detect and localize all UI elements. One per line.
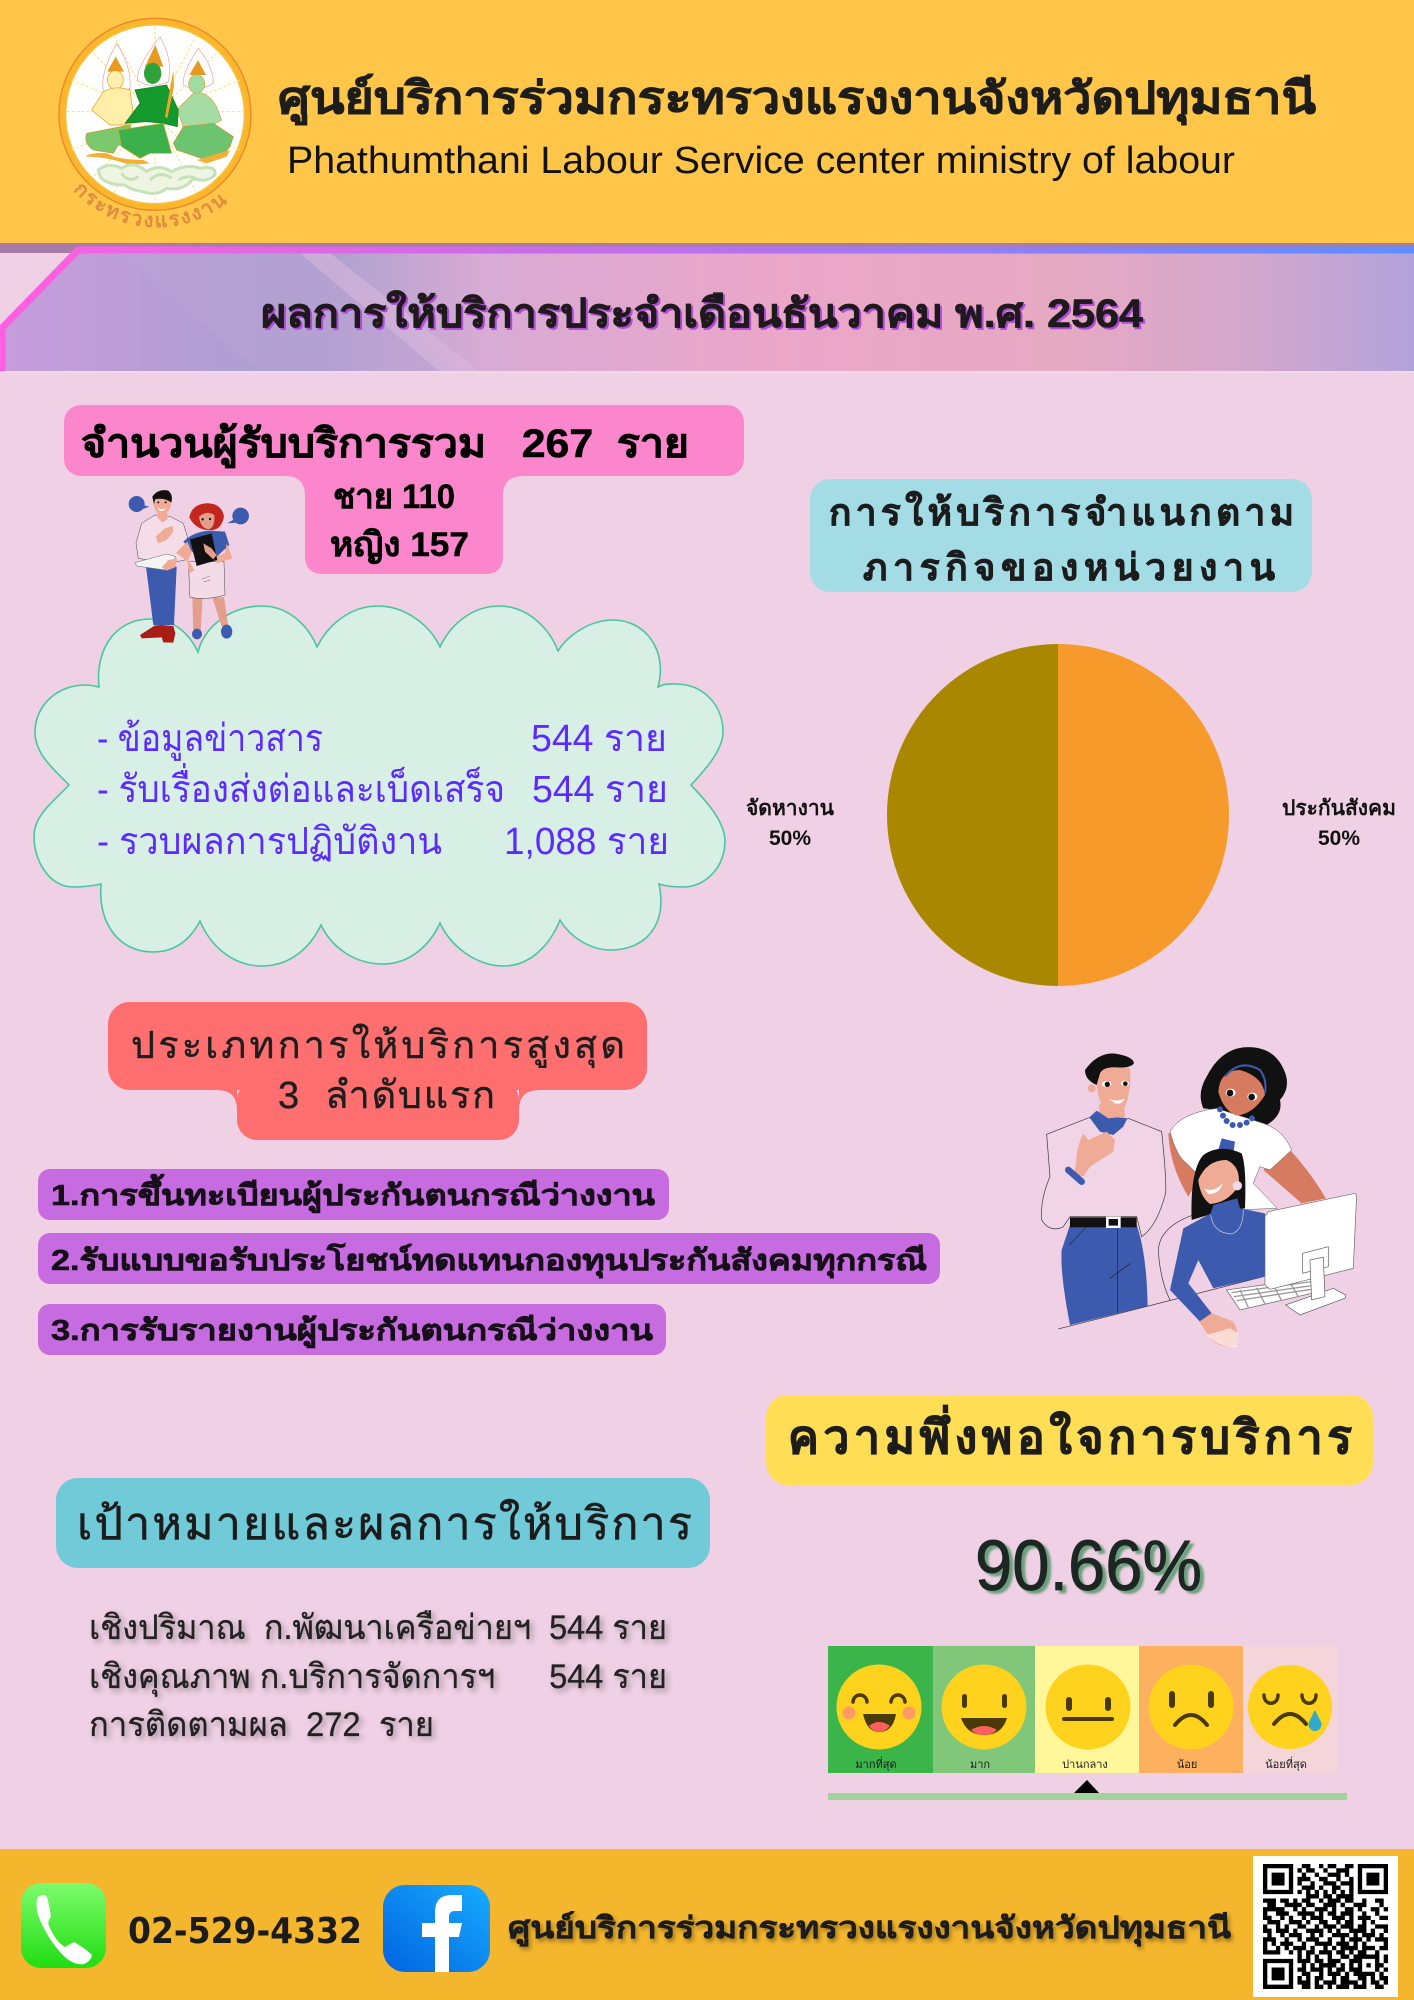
text block: targets and results [89, 1609, 667, 1744]
illustration: two staff [129, 490, 249, 643]
scale labels: ปานกลาง [1062, 1759, 1108, 1771]
panel: targets and results [56, 1478, 710, 1568]
satisfaction score: 90.66% [975, 1527, 1202, 1606]
title banner [0, 243, 1414, 373]
scale labels [855, 1756, 1307, 1771]
panel: satisfaction [766, 1395, 1373, 1485]
heading line two: 3 ลำดับแรก [278, 1075, 495, 1117]
item 1 [38, 1169, 669, 1220]
total heading: จำนวนผู้รับบริการรวม 267 ราย [81, 422, 689, 468]
female count: หญิง 157 [330, 526, 469, 565]
icon: facebook [383, 1885, 490, 1972]
panel: top three service heading [108, 1002, 647, 1140]
label: social security: ประกันสังคม [1282, 797, 1396, 820]
mission heading line one: การให้บริการจำแนกตาม [829, 490, 1294, 533]
label: social security: 50% [1318, 827, 1360, 850]
row: news [97, 718, 667, 761]
text block: targets and results: เชิงคุณภาพ ก.บริการจัดการฯ 544 ราย [89, 1658, 667, 1697]
male count: ชาย 110 [333, 478, 455, 516]
row: total performance: 1,088 ราย [504, 821, 669, 863]
row: news: - ข้อมูลข่าวสาร [97, 718, 323, 761]
item 3 [38, 1304, 666, 1355]
item 3: 3.การรับรายงานผู้ประกันตนกรณีว่างงาน [51, 1315, 653, 1348]
face: neutral [1046, 1664, 1130, 1750]
row: total performance [97, 821, 669, 863]
phone number: 02-529-4332 [128, 1911, 362, 1952]
QR code [1253, 1856, 1398, 1997]
face: very dissatisfied [1248, 1665, 1332, 1749]
label: employment: จัดหางาน [746, 797, 835, 820]
emblem: ministry of labour logo [59, 18, 251, 210]
scale labels: มากที่สุด [855, 1756, 897, 1771]
header band [0, 0, 1414, 243]
slice: social security 50% [1058, 644, 1229, 986]
row: total performance: - รวบผลการปฏิบัติงาน [97, 821, 442, 863]
face: very satisfied [836, 1664, 922, 1750]
satisfaction heading: ความพึ่งพอใจการบริการ [788, 1405, 1352, 1463]
panel: service by mission [810, 479, 1312, 592]
text block: targets and results: การติดตามผล 272 ราย [89, 1706, 434, 1744]
icon: phone [21, 1883, 106, 1968]
item 2 [38, 1233, 940, 1284]
item 1: 1.การขึ้นทะเบียนผู้ประกันตนกรณีว่างงาน [51, 1173, 655, 1213]
face: dissatisfied [1148, 1664, 1234, 1750]
row: news: 544 ราย [531, 718, 667, 760]
list: top three services [38, 1169, 940, 1355]
organisation name in English: Phathumthani Labour Service center ministry of labour [287, 140, 1235, 182]
emblem ring caption: กระทรวงแรงงาน [74, 184, 227, 228]
face: satisfied [942, 1664, 1026, 1750]
heading line one: ประเภทการให้บริการสูงสุด [131, 1024, 625, 1068]
mission heading line two: ภารกิจของหน่วยงาน [863, 547, 1275, 588]
footer band [0, 1849, 1414, 2000]
row: referrals [97, 763, 668, 811]
label: employment [746, 797, 835, 850]
slice: employment 50% [887, 644, 1058, 986]
label: employment: 50% [769, 827, 811, 850]
targets heading: เป้าหมายและผลการให้บริการ [77, 1498, 692, 1549]
label: social security [1282, 797, 1396, 850]
organisation name in Thai: ศูนย์บริการร่วมกระทรวงแรงงานจังหวัดปทุมธานี [278, 73, 1316, 126]
illustration: office team at computer [1041, 1047, 1357, 1347]
chart: satisfaction scale [828, 1646, 1347, 1800]
row: referrals: - รับเรื่องส่งต่อและเบ็ดเสร็จ [97, 763, 505, 811]
panel: total clients [64, 405, 744, 574]
banner heading: ผลการให้บริการประจำเดือนธันวาคม พ.ศ. 2564 [261, 290, 1144, 336]
row: referrals: 544 ราย [532, 769, 668, 811]
text block: targets and results: เชิงปริมาณ ก.พัฒนาเครือข่ายฯ 544 ราย [89, 1609, 667, 1647]
scale labels: น้อยที่สุด [1265, 1756, 1307, 1771]
scale labels: น้อย [1177, 1759, 1197, 1771]
item 2: 2.รับแบบขอรับประโยชน์ทดแทนกองทุนประกันสังคมทุกกรณี [51, 1242, 927, 1278]
panel: service cloud [34, 606, 725, 966]
chart: pie by mission [746, 644, 1396, 986]
facebook page name: ศูนย์บริการร่วมกระทรวงแรงงานจังหวัดปทุมธานี [508, 1911, 1232, 1947]
scale bar and pointer [828, 1780, 1347, 1800]
cloud shape [34, 606, 725, 966]
scale labels: มาก [970, 1759, 990, 1771]
